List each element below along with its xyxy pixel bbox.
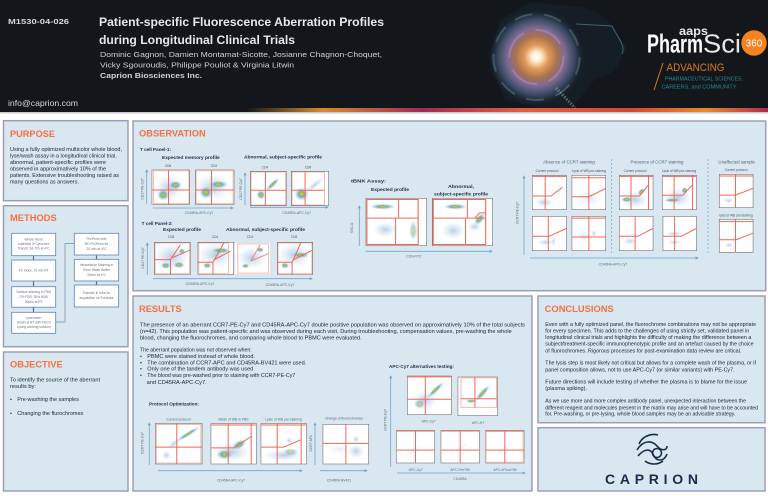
- T cell panel 2 figure: CD4: [212, 235, 218, 239]
- T cell panel 2 figure: CD8: [291, 235, 297, 239]
- objective text: •: [10, 397, 12, 403]
- CCR7 staining comparison figure: lysis of WB pre-staining: [719, 214, 753, 218]
- step: fix perm: BD Fix/Perm kit: [85, 242, 108, 246]
- protocol optimization figure: CD45RA APC-Cy7: [217, 478, 245, 482]
- step: whole blood: Transit: 34-72h at 4ºC: [18, 246, 50, 250]
- APC-Cy7 alternatives figure: [384, 364, 525, 481]
- tBNK assay figure: Expected profile: [371, 187, 409, 192]
- results bullet list: •: [140, 354, 142, 360]
- step: surface staining: 30min at RT: [25, 300, 43, 304]
- title: Patient-specific Fluorescence Aberration Profiles: [99, 17, 384, 29]
- conclusions text: Even with a fully optimized panel, the fluorochrome combinations may not be appropriate: [545, 322, 756, 328]
- APC-Cy7 alternatives figure: APC-Cy7 alternatives testing:: [389, 364, 454, 369]
- PharmSci 360 logo: aaps: [679, 24, 708, 38]
- step: intracellular staining: [74, 259, 119, 281]
- purpose text: patients. Extensive troubleshooting raised as: [10, 173, 119, 179]
- objective text: To identify the source of the aberrant: [10, 378, 101, 384]
- conclusions text: of fluorochromes. Rigorous processes for post-examination data review are critical.: [545, 348, 741, 354]
- CCR7 staining comparison figure: Unaffected sample: [718, 160, 756, 164]
- header banner: [0, 0, 768, 114]
- results bullet list: The aberrant population was not observed when:: [140, 348, 252, 354]
- plot: expected CD4: [195, 170, 234, 205]
- APC-Cy7 alternatives figure: APC-Cy7: [409, 468, 423, 472]
- heading: purpose: PURPOSE: [10, 129, 55, 139]
- panel: objective: [4, 352, 128, 491]
- plot: change of fluorochromes: [322, 424, 369, 464]
- results bullet list: Only one of the tandem antibody was used: [147, 366, 253, 372]
- step: lyse wash: Strain at RT with FACS: [17, 320, 51, 324]
- plot: abnormal CD4: [250, 171, 287, 206]
- T cell panel 2 figure: CD8: [168, 235, 174, 239]
- tBNK assay figure: Abnormal,: [448, 184, 474, 189]
- step: whole blood: Whole blood: [25, 238, 43, 242]
- CCR7 staining comparison figure: CD45RA-APC-Cy7: [599, 262, 627, 266]
- T cell panel 1 figure: [140, 147, 329, 215]
- plot: APC-eFluor780: [485, 430, 524, 464]
- panel: observation: [133, 121, 766, 291]
- protocol optimization figure: Lysis of WB pre-staining: [265, 418, 302, 422]
- conclusions text: different reagent and molecules present in the matrix may arise and will have to be accounted: [545, 405, 758, 411]
- PharmSci 360 logo: Pharm: [647, 28, 703, 58]
- conclusions text: The lysis step is most likely not critical but allows for a complete wash of the plasma, or if: [545, 360, 757, 366]
- tBNK assay figure: subject-specific profile: [434, 192, 488, 196]
- conclusions text: As we use more and more complex antibody panel, unexpected interaction between the: [545, 399, 746, 405]
- results bullet list: The blood was pre-washed prior to staining with CCR7-PE-Cy7: [147, 373, 295, 379]
- objective text: Changing the flurochromes: [17, 411, 84, 417]
- plot: APC-Fire750: [440, 430, 480, 464]
- conclusions text: for every specimen. This adds to the challenges of using strictly set, validated panel in: [545, 328, 749, 334]
- protocol optimization figure: Change of fluorochromes: [325, 416, 363, 420]
- CCR7 staining comparison figure: CCR7-PE-Cy7: [516, 202, 520, 224]
- plot: abnormal CD8: [291, 171, 329, 206]
- purpose text: [10, 147, 122, 186]
- step: fix perm: [74, 233, 119, 255]
- step: surface staining: [12, 287, 56, 307]
- tBNK assay figure: [350, 178, 493, 258]
- protocol optimization figure: CCR7 APC: [309, 434, 313, 451]
- PharmSci 360 logo: CAREERS, and COMMUNITY: [662, 84, 737, 90]
- plot: expected tBNK: [366, 198, 427, 246]
- T cell panel 1 figure: CD45RA-APC-Cy7: [282, 211, 311, 215]
- plot: wash of WB: [210, 423, 257, 464]
- T cell panel 1 figure: CD8: [165, 164, 171, 168]
- results bullet list: The combination of CCR7-APC and CD45RA-BV421 were used.: [147, 360, 306, 366]
- purpose text: Using a fully optimized multicolor whole blood,: [10, 147, 122, 153]
- APC-Cy7 alternatives figure: APC-H7: [472, 421, 484, 425]
- T cell panel 2 figure: Abnormal, subject-specific profile: [226, 227, 305, 232]
- heading: results: RESULTS: [139, 304, 182, 314]
- conclusions text: subject/treatment-specific immunophenotypic profile and an artefact caused by the choice: [545, 342, 754, 348]
- conclusions text: Future directions will include testing of whether the plasma is to blame for the issue: [545, 380, 747, 386]
- tBNK assay figure: tBNK Assay:: [351, 178, 387, 184]
- T cell panel 1 figure: CD27 PE-Cy7: [239, 178, 243, 200]
- authors: Caprion Biosciences Inc.: [100, 71, 202, 80]
- protocol optimization figure: Current protocol: [166, 418, 191, 422]
- PharmSci 360 logo: ADVANCING: [666, 62, 724, 74]
- APC-Cy7 alternatives figure: CCR7 PE-Cy7: [384, 409, 388, 431]
- APC-Cy7 alternatives figure: APC-Fire750: [450, 468, 470, 472]
- step: surface staining: Surface staining in PBS: [16, 290, 52, 294]
- plot: APC-H7: [458, 376, 498, 416]
- results bullet list: [140, 348, 306, 386]
- plot: expected CD8: [154, 242, 191, 275]
- APC-Cy7 alternatives figure: APC-eFluor780: [493, 468, 517, 472]
- CCR7 staining comparison figure: Current protocol: [725, 168, 748, 172]
- T cell panel 2 figure: CD45RA-APC-Cy7: [266, 283, 294, 287]
- results paragraph: [140, 322, 525, 342]
- T cell panel 2 figure: Expected profile: [163, 227, 201, 232]
- APC-Cy7 alternatives figure: APC-Cy7: [422, 420, 436, 424]
- step: fix perm: 20 min at 4ºC: [87, 247, 107, 251]
- step: lyse wash: Lysing working solution: [17, 325, 51, 329]
- step: whole blood: [12, 233, 56, 256]
- T cell panel 2 figure: CD4: [247, 235, 253, 239]
- step: transfer: acquisition on Fortessa: [80, 296, 114, 300]
- T cell panel 2 figure: T cell Panel-2:: [142, 221, 173, 226]
- results bullet list: and CD45RA-APC-Cy7.: [147, 380, 207, 386]
- purpose text: many questions as answers.: [10, 180, 79, 186]
- authors: Dominic Gagnon, Damien Montamat-Sicotte, Josianne Chagnon-Choquet,: [100, 50, 382, 59]
- purpose text: abnormal, patient-specific profiles were: [10, 160, 106, 166]
- purpose text: lyse/wash assay in a longitudinal clinical trial,: [10, 154, 117, 160]
- T cell panel 1 figure: Expected memory profile: [162, 155, 220, 160]
- plot: abnormal CD8: [277, 242, 313, 275]
- conclusions text: panel composition allows, not to use APC-Cy7 (or similar variants) with PE-Cy7.: [545, 367, 735, 373]
- T cell panel 1 figure: CD27 PE-Cy7: [140, 178, 144, 200]
- step: transfer: [74, 285, 119, 307]
- T cell panel 1 figure: T cell Panel-1:: [140, 147, 171, 152]
- panel: purpose: [4, 121, 128, 201]
- protocol optimization figure: CD45RA BV421: [327, 478, 351, 482]
- conclusions text: longitudinal clinical trials and highlights the difficulty of making the difference between a: [545, 335, 751, 341]
- objective text: Pre-washing the samples: [17, 397, 79, 403]
- CCR7 staining comparison figure: Lysis of WB pre-staining: [662, 169, 696, 173]
- APC-Cy7 alternatives figure: CD45RA: [453, 477, 467, 481]
- results paragraph: (n=42). This population was patient-specific and was observed during each visit. During troubleshooting, compensation values, pre-washing the whole: [140, 329, 512, 335]
- plot: APC-Cy7 diluted: [396, 430, 435, 464]
- objective text: •: [10, 411, 12, 417]
- panel: results: [133, 296, 532, 491]
- CCR7 staining comparison figure: Lysis of WB pre-staining: [572, 169, 606, 173]
- title: [99, 17, 384, 47]
- CCR7 staining comparison figure: Current protocol: [536, 169, 559, 173]
- heading: observation: OBSERVATION: [139, 129, 206, 139]
- contact email: info@caprion.com: [8, 99, 78, 108]
- CCR7 staining comparison figure: Current protocol: [624, 169, 647, 173]
- step: fix perm: Fix/Perm with: [87, 237, 107, 241]
- plot grid: presence of CCR7: [619, 175, 697, 251]
- results bullet list: PBMC were stained instead of whole blood.: [147, 354, 255, 360]
- step: surface staining: 2% FBS, 30% BSB: [20, 295, 49, 299]
- PharmSci 360 logo: 360: [746, 38, 763, 50]
- title: during Longitudinal Clinical Trials: [99, 35, 295, 47]
- T cell panel 1 figure: Abnormal, subject-specific profile: [244, 154, 322, 160]
- purpose text: observed in approximatively 10% of the: [10, 166, 106, 172]
- CCR7 staining comparison figure: Absence of CCR7 staining: [543, 160, 595, 164]
- step: whole blood: collected in Cytochex: [18, 242, 50, 246]
- plot: abnormal CD4: [235, 243, 270, 274]
- results bullet list: •: [140, 366, 142, 372]
- results paragraph: The presence of an aberrant CCR7-PE-Cy7 and CD45RA-APC-Cy7 double positive population was observed on approximatively 10% of the total subjects: [140, 322, 525, 328]
- protocol optimization figure: [140, 402, 369, 482]
- step: lyse wash: [12, 312, 56, 333]
- step: intracellular staining: Intracellular Staining in: [80, 263, 113, 267]
- panel: Caprion logo: [538, 428, 765, 491]
- plot: current protocol: [155, 423, 202, 464]
- T cell panel 1 figure: CD4: [211, 164, 217, 168]
- T cell panel 1 figure: CD4: [262, 166, 268, 170]
- protocol optimization figure: Protocol Optimization:: [149, 402, 199, 406]
- step: intracellular staining: 30min at 4ºC: [87, 273, 107, 277]
- tBNK assay figure: CD3-FITC: [406, 254, 422, 258]
- conclusions text: (plasma spiking).: [545, 386, 587, 392]
- results paragraph: blood, changing the fluorochromes, and comparing whole blood to PBMC were evaluated.: [140, 336, 362, 342]
- poster number: M1530-04-026: [8, 19, 69, 26]
- plot: expected CD4: [198, 242, 234, 275]
- heading: objective: OBJECTIVE: [10, 360, 63, 370]
- step: transfer: Transfer in tube for: [83, 291, 111, 295]
- T cell panel 1 figure: CD45RA-APC-Cy7: [185, 211, 213, 215]
- plot column: unaffected sample: [719, 174, 753, 252]
- heading: conclusions: CONCLUSIONS: [545, 304, 614, 314]
- T cell panel 2 figure: [141, 221, 313, 287]
- results bullet list: •: [140, 360, 142, 366]
- results bullet list: •: [140, 373, 142, 379]
- objective text: [10, 378, 101, 417]
- icon: Caprion swirl: [637, 434, 667, 464]
- T cell panel 1 figure: CD8: [305, 166, 311, 170]
- tBNK assay figure: SSC-A: [350, 222, 354, 233]
- PharmSci 360 logo: [647, 24, 767, 90]
- conclusions text: for. Pre-washing, or pre-lysing, whole blood samples may be an advisable strategy.: [545, 412, 735, 418]
- logo wordmark: CAPRION: [605, 471, 698, 487]
- flow chart: [12, 233, 119, 333]
- T cell panel 2 figure: CD27 PE-Cy7: [141, 247, 145, 269]
- heading: methods: METHODS: [10, 213, 57, 223]
- PharmSci 360 logo: PHARMACEUTICAL SCIENCES,: [665, 77, 743, 83]
- galaxy head image: [486, 2, 626, 108]
- conclusions text: [545, 322, 758, 418]
- plot grid: absence of CCR7: [532, 175, 606, 251]
- panel: conclusions: [538, 296, 765, 423]
- plot: expected CD8: [152, 170, 190, 205]
- authors: Vicky Sgouroudis, Philippe Pouliot & Virginia Litwin: [100, 60, 294, 70]
- T cell panel 2 figure: CD45RA-APC-Cy7: [186, 282, 214, 286]
- authors: [100, 50, 382, 80]
- plot: APC-Cy7: [407, 376, 452, 415]
- CCR7 staining comparison figure: [516, 159, 756, 266]
- step: lyse wash: Lyse/wash:: [26, 316, 42, 320]
- step: FC block: FC block, 10 min RT: [19, 268, 49, 272]
- plot: abnormal tBNK: [432, 198, 493, 246]
- plot: lysis of WB: [260, 423, 307, 464]
- PharmSci 360 logo: Sci: [703, 28, 741, 58]
- protocol optimization figure: CCR7 PE-Cy7: [140, 432, 144, 454]
- panel: methods: [4, 206, 128, 347]
- step: intracellular staining: Perm Wash Buffer: [83, 268, 111, 272]
- objective text: results by:: [10, 384, 36, 390]
- CCR7 staining comparison figure: Presence of CCR7 staining: [631, 160, 684, 164]
- protocol optimization figure: Wash of WB in PBS: [218, 418, 249, 422]
